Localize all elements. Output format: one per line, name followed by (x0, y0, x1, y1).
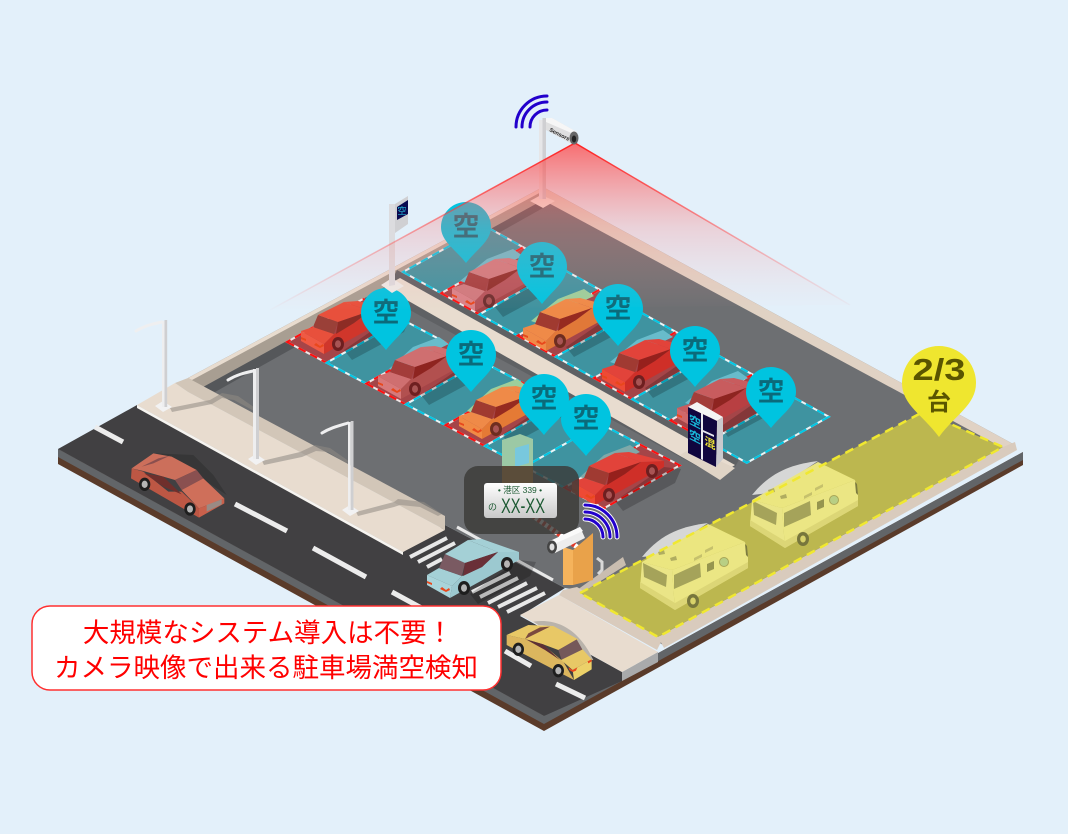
callout text: 大規模なシステム導入は不要！ (83, 618, 453, 648)
roadside info sign on pole: 空 (397, 206, 407, 216)
big occupancy sign (680, 402, 735, 480)
pin: empty slot 5: 空 (758, 377, 784, 407)
callout (32, 606, 501, 690)
gate camera (547, 527, 585, 554)
callout text (54, 618, 478, 683)
pin: empty slot 4 (670, 326, 720, 387)
ticket machine (502, 434, 533, 492)
callout text: カメラ映像で出来る駐車場満空検知 (54, 653, 478, 683)
pin: empty slot 3: 空 (604, 294, 632, 324)
pin: empty slot 2: 空 (528, 252, 556, 282)
pin: empty slot 7 (446, 330, 496, 392)
pin: RV lot count 2/3: 2/3 (912, 352, 966, 387)
island by the gate (520, 595, 658, 681)
pin: empty slot 3 (593, 284, 643, 346)
parking asphalt (188, 187, 1015, 645)
gate post (563, 533, 593, 585)
roadside info sign on pole (381, 196, 408, 293)
license plate (484, 483, 557, 518)
street lamp 3 (322, 421, 359, 516)
gate-side curb (559, 557, 663, 650)
pin: empty slot 6: 空 (372, 298, 400, 328)
road surface (58, 405, 622, 716)
pin: empty slot 1: 空 (452, 212, 480, 242)
road car: red sedan (131, 453, 227, 518)
big occupancy sign: 空 (689, 427, 701, 447)
parking slots: lower row (287, 299, 680, 508)
gate barrier (533, 516, 602, 574)
security camera (546, 118, 578, 144)
road car: yellow sedan (507, 625, 592, 680)
license plate: XX-XX (501, 495, 545, 518)
pin: empty slot 5 (746, 367, 796, 428)
parked car: red, lower row 4 (572, 452, 681, 511)
parked car: pink-red, upper row 4 (677, 378, 786, 437)
RV lot zone (yellow) (580, 412, 1003, 637)
parked car: pink-red, upper row 1 (452, 258, 561, 317)
crosswalk: upper (410, 538, 455, 567)
slab: ground base edges (58, 449, 1023, 731)
parking slots: upper row (403, 226, 829, 463)
big occupancy sign: 空 (689, 412, 701, 432)
street lamp 1 (136, 320, 172, 412)
wifi signal: gate (585, 505, 617, 537)
pin: empty slot 7: 空 (458, 340, 484, 370)
crosswalk: lower (472, 573, 545, 612)
lamp shadows (170, 393, 442, 516)
pin: RV lot count 2/3 (902, 346, 976, 437)
RV: second (750, 462, 858, 548)
pin: empty slot 8: 空 (530, 384, 558, 414)
road car: pale blue sedan (427, 539, 536, 604)
pin: empty slot 9: 空 (572, 404, 600, 434)
wall: back-right (543, 187, 1015, 448)
RV dome: second (752, 461, 818, 495)
pin: empty slot 2 (517, 242, 567, 304)
street lamp 2 (228, 368, 265, 465)
median strip (384, 270, 740, 477)
road markings: centre dashes (95, 427, 585, 698)
license plate: • 港区 339 • (498, 485, 542, 495)
parked car: red, upper row 3 (602, 339, 711, 398)
detection field: red camera view cone (270, 143, 850, 310)
stop line (457, 527, 553, 580)
ghost outlines in empty slots (389, 249, 748, 482)
pin: empty slot 6 (361, 288, 411, 350)
parked car: orange, upper row 2 (523, 298, 632, 357)
RV lot dashed outline (580, 412, 1003, 637)
RV lot: front curb (658, 442, 1017, 648)
pin: empty slot 1 (441, 202, 491, 263)
license plate panel (464, 466, 579, 534)
camera pole (530, 118, 555, 208)
security camera: Sensors (548, 127, 570, 143)
parked car: pink-red, lower row 2 (378, 346, 487, 405)
big occupancy sign: 混 (704, 434, 716, 453)
wall: back-left (188, 187, 543, 392)
parked car: orange, lower row 3 (459, 386, 568, 445)
RV: first (640, 524, 748, 610)
wifi signal: camera (516, 96, 547, 127)
pin: empty slot 4: 空 (682, 336, 708, 366)
parked car: red, lower row 1 (301, 301, 410, 360)
pin: empty slot 9 (561, 394, 611, 456)
pin: RV lot count 2/3: 台 (927, 389, 951, 416)
sidewalk with curb (137, 378, 445, 555)
license plate: の (488, 502, 497, 512)
RV dome: first (642, 523, 708, 557)
pin: empty slot 8 (519, 374, 569, 435)
